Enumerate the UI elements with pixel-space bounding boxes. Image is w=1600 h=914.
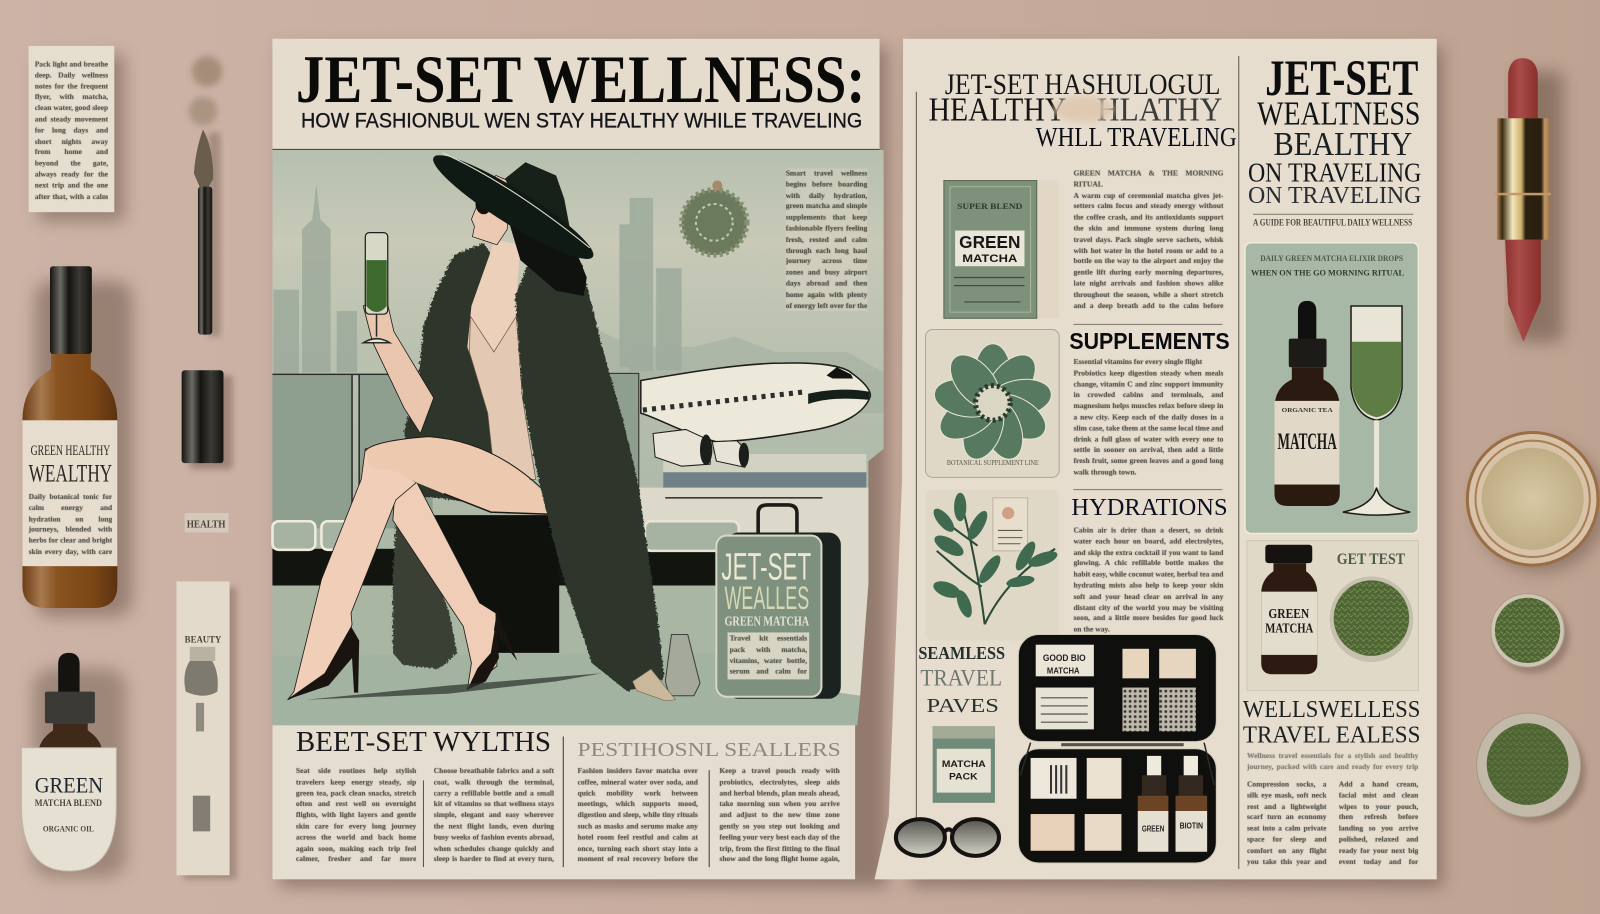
folded tube card: BEAUTY [185, 635, 222, 645]
amber bottle: green wealthy: WEALTHY [29, 458, 112, 487]
bottle: green matcha capsules: GREEN [1268, 606, 1310, 621]
panel: herb card [926, 490, 1059, 641]
heading: right column: WEALTNESS [1257, 95, 1420, 132]
raised arm [363, 296, 434, 434]
sunglasses [896, 819, 999, 856]
airport terminal [663, 454, 866, 498]
text block: supplements: Essential vitamins for every single flight [1073, 357, 1202, 366]
dropper bottle: matcha: ORGANIC TEA [1282, 408, 1333, 414]
heading: seamless travel packs: SEAMLESS [918, 643, 1005, 663]
shadow on floor [306, 673, 602, 700]
travel sachet pack: MATCHA [942, 759, 986, 769]
champagne glass [363, 233, 390, 343]
jar: small green powder [1491, 594, 1569, 673]
heading: right column: BEALTHY [1273, 126, 1412, 163]
floor [272, 586, 860, 725]
wide brim hat [424, 143, 602, 272]
heading: seamless travel packs: TRAVEL [920, 666, 1002, 691]
panel: matcha sage card [1245, 243, 1418, 534]
back coat and lower fur [393, 525, 457, 669]
bottle: green matcha capsules [1261, 545, 1317, 674]
bench seats and base [272, 518, 739, 586]
panel: green book card: GREEN [959, 232, 1020, 252]
panel: matcha sage card: WHEN ON THE GO MORNING RITUAL [1251, 268, 1405, 277]
heading: seamless travel packs [918, 643, 1005, 717]
legs [288, 437, 547, 700]
long hair [502, 182, 587, 296]
right fur panel [515, 257, 664, 692]
bottle: green matcha capsules: MATCHA [1265, 620, 1314, 635]
dropper bottle: matcha [1274, 301, 1340, 506]
panel: green powder card: GET TEST [1337, 551, 1405, 568]
suitcase [716, 505, 841, 699]
panel: flower card [926, 329, 1059, 477]
small label: HEALTH [187, 519, 226, 530]
footer heading: left: BEET-SET WYLTHS [296, 727, 551, 758]
champagne glass: green drink [1343, 306, 1410, 515]
panel: flower card: BOTANICAL SUPPLEMENT LINE [947, 459, 1039, 467]
icon: herb sprig [930, 493, 1059, 624]
lipstick cap [182, 370, 233, 469]
dropper bottle: green: GREEN [35, 773, 103, 798]
dropper bottle: green: MATCHA BLEND [35, 798, 102, 808]
suitcase: GREEN MATCHA [724, 613, 810, 628]
amber bottle: green wealthy: GREEN HEALTHY [31, 443, 110, 459]
airplane [641, 363, 870, 467]
black skirt shadow [420, 515, 559, 653]
panel: matcha sage card: DAILY GREEN MATCHA ELIXIR DROPS [1260, 254, 1403, 263]
heading: seamless travel packs: PAVES [927, 695, 999, 717]
powder dish [1330, 576, 1413, 662]
heading: right column: ON TRAVELING [1248, 182, 1421, 209]
wellness travel kit: MATCHA [1047, 666, 1080, 675]
water bottle and scarf on floor [633, 634, 700, 701]
jar: large green powder [1477, 713, 1586, 822]
suitcase: JET-SET [721, 545, 811, 587]
travel sachet pack: PACK [949, 771, 978, 781]
flower emblem [682, 181, 747, 255]
compact: cream [1467, 433, 1600, 572]
dropper bottle: green: ORGANIC OIL [43, 824, 94, 833]
bench backs [272, 373, 639, 530]
panel: green book card: MATCHA [962, 253, 1017, 265]
heading: right column: ON TRAVELING [1248, 157, 1422, 188]
wellness travel kit [1018, 634, 1216, 863]
sunglasses [476, 194, 492, 214]
dropper bottle: matcha: MATCHA [1278, 429, 1337, 455]
heading: right column: A GUIDE FOR BEAUTIFUL DAILY WELLNESS [1253, 217, 1412, 227]
panel: green book card: SUPER BLEND [957, 202, 1023, 211]
heading: wellness travel: WELLSWELLESS [1243, 696, 1420, 723]
poster header paper [272, 39, 880, 151]
wellness travel kit: GREEN [1142, 824, 1164, 833]
panel: green book card [944, 181, 1059, 318]
ground behind window [639, 488, 868, 696]
text block: green intro: GREEN MATCHA & THE MORNING RITUAL [1073, 168, 1223, 189]
amber bottle: green wealthy [22, 266, 133, 617]
travel sachet pack [933, 726, 995, 803]
text block: supplements: Probiotics keep digestion steady when meals change, vitamin C and zinc support immunity in crowded cabins and terminals, and magnesium helps muscles relax before sleep in a new city. Keep each of the daily doses in a slim case, take them at the same local time and drink a full glass of water with every one to settle in sooner on arrival, then add a little fresh fruit, some green leaves and a good long walk through town. [1073, 368, 1223, 476]
icon: green lotus [931, 344, 1054, 465]
heading: main left: HEALTHY [929, 91, 1066, 128]
dropper bottle: green [21, 653, 127, 877]
subtitle: HOW FASHIONBUL WEN STAY HEALTHY WHILE TRAVELING [301, 109, 862, 133]
heading: main left [929, 69, 1237, 152]
illustration: airport lounge background [272, 150, 884, 725]
folded tube card [177, 581, 237, 879]
heading: wellness travel [1243, 696, 1420, 749]
lipstick [1495, 58, 1563, 342]
heading: right column: JET-SET [1265, 51, 1418, 107]
wellness travel kit: GOOD BIO [1043, 653, 1086, 663]
small label [185, 513, 229, 532]
heading: wellness travel: TRAVEL EALESS [1243, 722, 1420, 749]
heading: supplements: SUPPLEMENTS [1069, 328, 1230, 354]
paper card: top-left note [29, 46, 124, 221]
neck and chest [467, 240, 522, 413]
suitcase: WEALLES [724, 579, 809, 616]
panel: left poster [272, 39, 888, 887]
panel: green powder card [1247, 541, 1418, 691]
footer heading: right: PESTIHOSNL SEALLERS [578, 739, 841, 761]
high heel shoes [287, 626, 359, 700]
dress [469, 316, 536, 479]
wellness travel kit: BIOTIN [1180, 821, 1203, 830]
heading: main left: WHLL TRAVELING [1036, 121, 1237, 152]
woman in fur coat [287, 143, 664, 700]
title: JET-SET WELLNESS: [296, 42, 865, 117]
text block: hydrations: Cabin air is drier than a desert, so drink water each hour on board, add electrolytes, and skip the extra cocktail if you want to land glowing. A chic refillable bottle makes the habit easy, while coconut water, herbal tea and hydrating mists also help to keep your skin soft and your head clear on arrival in any distant city of the world you may be visiting soon, and a little more besides for good luck on the way. [1073, 525, 1223, 634]
heading: hydrations: HYDRATIONS [1071, 494, 1228, 521]
left fur panel [404, 243, 497, 505]
face [471, 175, 510, 245]
makeup brush [189, 56, 222, 337]
heading: main left: HLATHY [1097, 91, 1222, 128]
panel: right poster [874, 39, 1443, 887]
poster footer paper [272, 725, 855, 879]
skyline [273, 184, 884, 413]
heading: right column [1248, 51, 1422, 227]
heading: main left: JET-SET HASHULOGUL [945, 69, 1220, 101]
